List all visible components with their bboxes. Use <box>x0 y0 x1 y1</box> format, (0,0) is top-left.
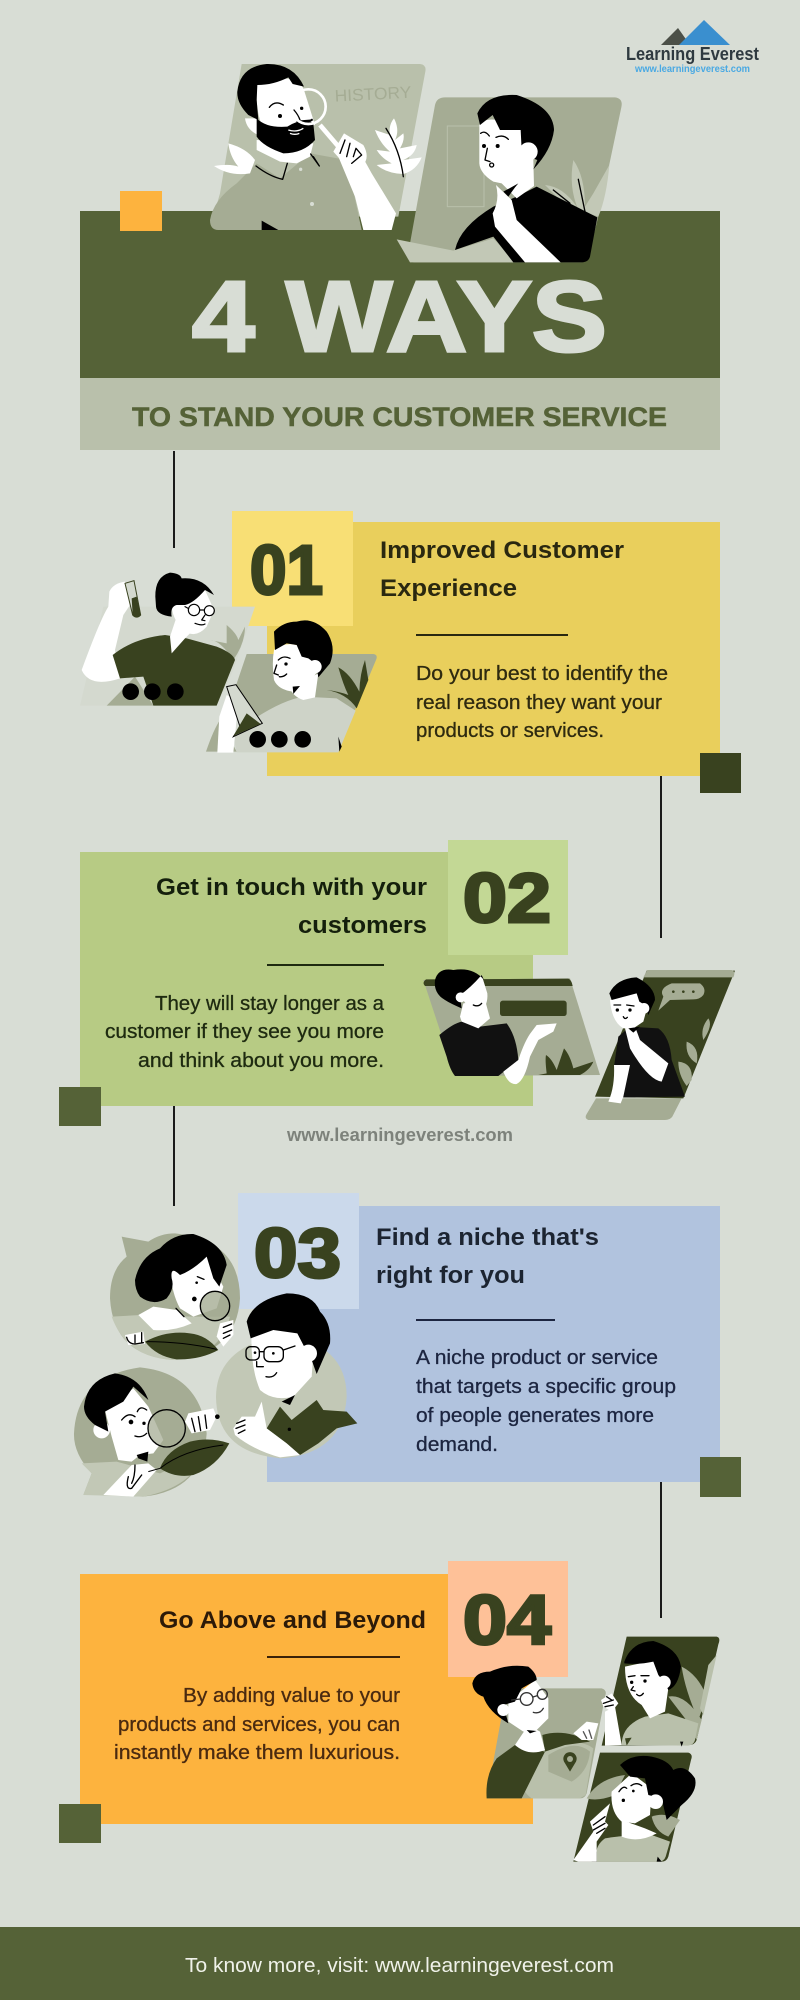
heading: Improved Customer Experience <box>380 537 624 602</box>
number box 02 <box>448 840 568 955</box>
illustration: header characters <box>210 64 622 262</box>
woman with map <box>472 1666 606 1798</box>
body text 02: and think about you more. <box>138 1050 384 1072</box>
logo: Learning Everest <box>626 20 759 75</box>
heading: Find a niche that's right for you <box>376 1224 599 1289</box>
body text 03: that targets a specific group <box>416 1376 676 1398</box>
logo: Learning Everest: www.learningeverest.com <box>634 64 750 75</box>
man waving <box>601 1637 719 1747</box>
subtitle band: TO STAND YOUR CUSTOMER SERVICE <box>132 402 667 432</box>
body text 02: They will stay longer as a <box>155 993 385 1015</box>
man thinking <box>397 95 622 262</box>
number box 04: 04 <box>463 1581 551 1659</box>
number box 01 <box>232 511 353 626</box>
woman with test tube <box>80 573 255 706</box>
heading: Find a niche that's right for you: right for you <box>376 1262 525 1289</box>
title: 4 WAYS: 4 WAYS <box>192 261 607 373</box>
heading: Get in touch with your customers: customers <box>298 912 427 939</box>
body text 03: A niche product or service <box>416 1347 658 1369</box>
body text 02: customer if they see you more <box>105 1021 384 1043</box>
number box 03 <box>238 1193 359 1309</box>
footer band: To know more, visit: www.learningeverest.com <box>185 1955 614 1977</box>
body text 01: real reason they want your <box>416 692 662 714</box>
boy with flask <box>206 620 377 753</box>
body text 03: of people generates more <box>416 1405 654 1427</box>
square accent 03 <box>700 1457 741 1497</box>
title banner <box>80 211 720 378</box>
number box 01: 01 <box>250 531 323 609</box>
body text 04: By adding value to your <box>183 1685 400 1707</box>
body text 03 <box>416 1347 676 1456</box>
body text 01: products or services. <box>416 720 604 742</box>
woman pointing <box>573 1753 696 1862</box>
woman with magnifier and leaf <box>110 1233 240 1360</box>
square accent 01 <box>700 753 741 793</box>
number box 04 <box>448 1561 568 1677</box>
body text 01: Do your best to identify the <box>416 663 668 685</box>
number box 03: 03 <box>254 1214 341 1292</box>
panel: step 02 <box>80 840 568 1106</box>
heading: Get in touch with your customers <box>156 874 427 939</box>
body text 01 <box>416 663 668 742</box>
illustration: conversation <box>423 969 735 1120</box>
illustration: researchers with magnifiers <box>74 1233 357 1497</box>
man with magnifying glass: HISTORY <box>334 83 412 106</box>
footer band <box>0 1927 800 2000</box>
man with glasses thumbs up <box>216 1293 357 1458</box>
square accent 04 <box>59 1804 101 1843</box>
body text 04: products and services, you can <box>118 1714 400 1736</box>
orange accent square <box>120 191 162 231</box>
connector line 4 <box>660 1482 662 1618</box>
woman talking <box>423 969 600 1084</box>
body text 04 <box>114 1685 400 1764</box>
man thinking with speech bubble <box>586 970 735 1120</box>
number box 02: 02 <box>463 859 551 937</box>
heading: Improved Customer Experience: Experience <box>380 575 517 602</box>
body text 03: demand. <box>416 1434 498 1456</box>
connector line 2 <box>660 776 662 938</box>
heading: Improved Customer Experience: Improved Customer <box>380 537 624 564</box>
panel: step 01 <box>232 511 720 776</box>
illustration: lab scientists <box>80 573 377 753</box>
connector line 3 <box>173 1106 175 1206</box>
heading: Find a niche that's right for you: Find a niche that's <box>376 1224 599 1251</box>
panel: step 03 <box>238 1193 720 1482</box>
connector line 1 <box>173 451 175 548</box>
square accent 02 <box>59 1087 101 1126</box>
watermark url: www.learningeverest.com <box>286 1125 513 1145</box>
heading: Go Above and Beyond: Go Above and Beyond <box>159 1607 426 1634</box>
man with magnifying glass <box>210 64 426 230</box>
logo: Learning Everest: Learning Everest <box>626 44 759 64</box>
boy with magnifier and leaf <box>74 1367 229 1497</box>
illustration: three people <box>472 1637 719 1862</box>
body text 04: instantly make them luxurious. <box>114 1742 400 1764</box>
heading: Get in touch with your customers: Get in touch with your <box>156 874 427 901</box>
panel: step 04 <box>80 1561 568 1824</box>
body text 02 <box>105 993 385 1072</box>
subtitle band <box>80 378 720 450</box>
